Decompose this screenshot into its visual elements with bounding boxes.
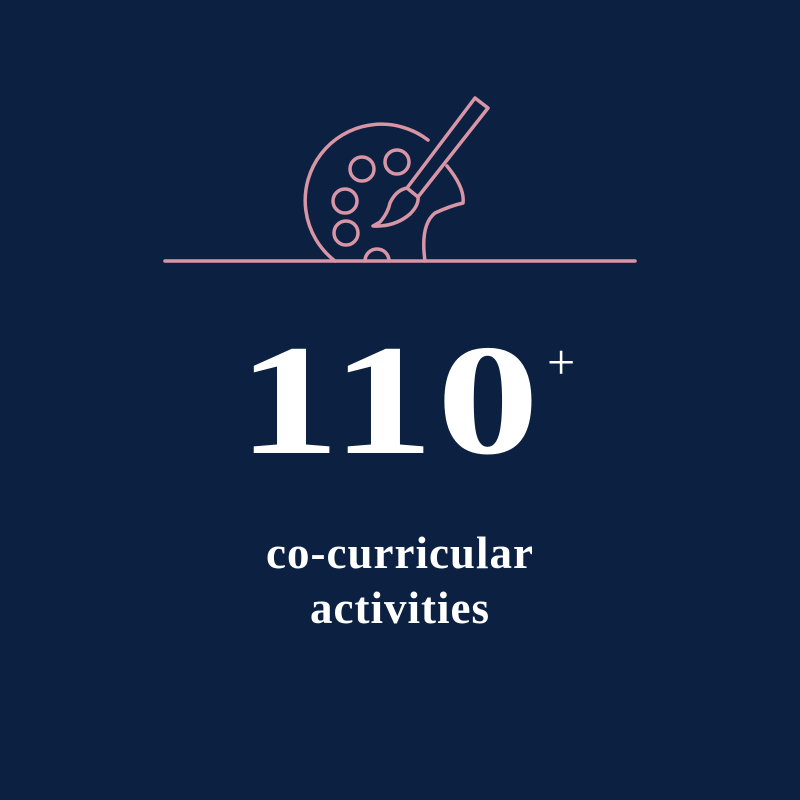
caption: co-curricular (266, 528, 534, 578)
caption: activities (310, 583, 490, 633)
icon: palette and brush (163, 96, 637, 263)
number: 110 (237, 313, 542, 488)
plus sign: + (547, 334, 575, 390)
caption (266, 528, 534, 633)
